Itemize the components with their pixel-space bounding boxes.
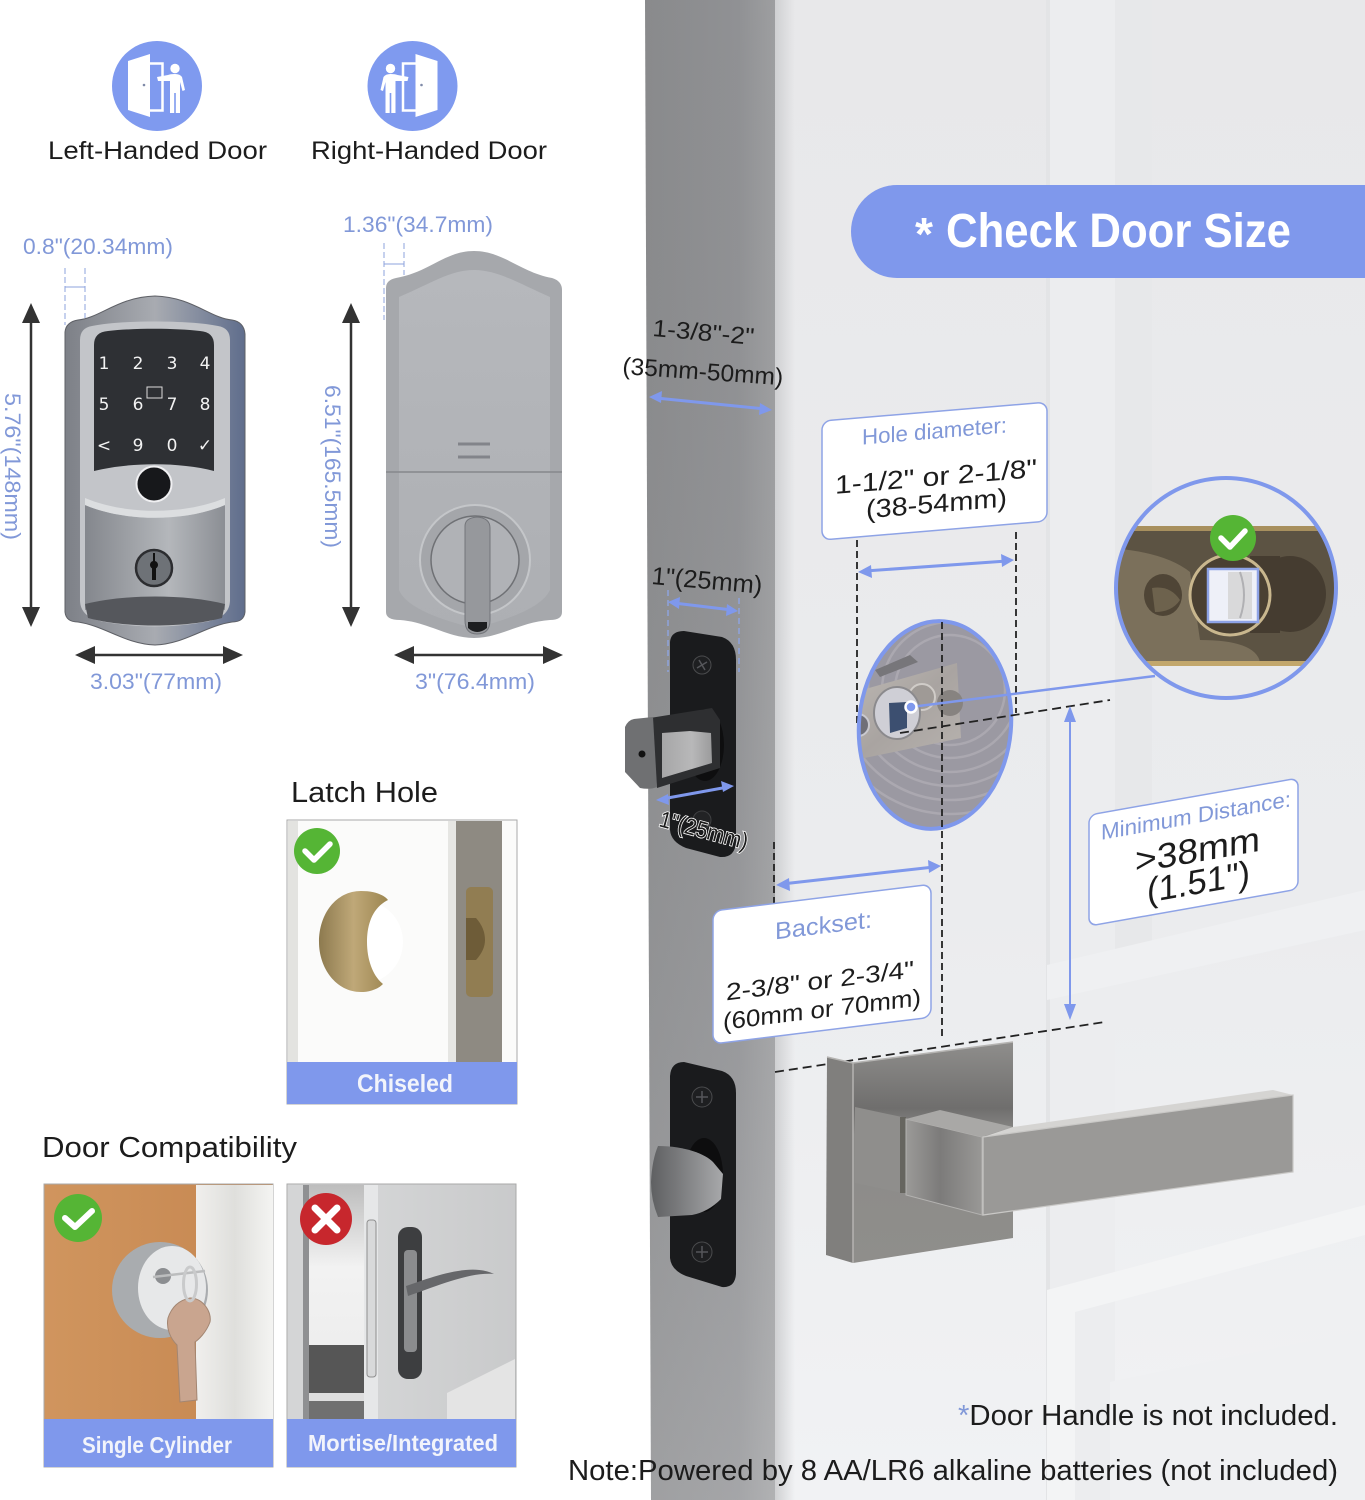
connector dot xyxy=(906,702,916,712)
check badge xyxy=(54,1194,102,1242)
height label: front lock: 5.76"(148mm) xyxy=(0,393,25,540)
callout: minimum distance: (1.51") xyxy=(1147,854,1250,911)
square socket xyxy=(1208,569,1258,622)
width arrow: front lock xyxy=(75,646,243,664)
bored hole xyxy=(319,900,403,984)
back body xyxy=(386,251,562,638)
check badge xyxy=(1210,515,1256,561)
mortise faceplate xyxy=(367,1220,376,1377)
callout: minimum distance: Minimum Distance: xyxy=(1101,787,1291,845)
depth dimension: front lock xyxy=(23,234,173,325)
keypad digits: 9 xyxy=(133,436,143,456)
callout: hole diameter xyxy=(822,402,1047,540)
door thickness dimension xyxy=(622,315,784,415)
door frame edge xyxy=(645,0,775,1500)
callout: minimum distance xyxy=(1089,778,1298,926)
heading: latch hole: Latch Hole xyxy=(291,777,438,809)
cross badge xyxy=(300,1193,352,1245)
bolt xyxy=(650,708,720,788)
check badge xyxy=(294,828,340,874)
lower lock housing xyxy=(85,505,225,610)
callout: hole diameter: Hole diameter: xyxy=(862,413,1007,450)
panel: door scene xyxy=(645,0,1365,1500)
banner: check door size: Check Door Size xyxy=(946,205,1291,258)
thumb turn xyxy=(420,505,530,615)
hole diameter dimension lines xyxy=(857,532,1016,725)
lever bar xyxy=(983,1095,1293,1215)
backset and centre guide lines xyxy=(774,622,1110,1072)
keypad digits xyxy=(97,354,212,456)
back lock illustration xyxy=(386,251,562,638)
keypad digits: 4 xyxy=(200,354,210,374)
door lever xyxy=(398,1227,422,1379)
lock body xyxy=(65,296,245,645)
upper plate width dimension xyxy=(650,562,763,672)
note: door handle not included: *Door Handle is not included. xyxy=(958,1400,1338,1432)
front lock illustration xyxy=(65,296,245,645)
rose plate xyxy=(826,1057,853,1263)
icon: left-handed door xyxy=(112,41,202,131)
label: right-handed door: Right-Handed Door xyxy=(311,137,547,165)
keypad digits: ✓ xyxy=(198,436,212,456)
banner: check door size: * xyxy=(915,208,933,260)
minimum distance arrow xyxy=(1064,706,1076,1020)
callout: backset: Backset: xyxy=(775,907,872,945)
panel: chiseled latch hole xyxy=(287,820,517,1104)
keyhole xyxy=(136,550,172,586)
lower strike plate with latch xyxy=(651,1062,736,1287)
callout: backset xyxy=(713,884,931,1044)
keypad digits: 8 xyxy=(200,395,210,415)
backset arrow xyxy=(776,860,941,891)
bored hole close-up xyxy=(856,619,1014,831)
callout: minimum distance: >38mm xyxy=(1135,820,1260,881)
magnifier connector line xyxy=(911,676,1155,707)
lower bolt width dimension: 1"(25mm) xyxy=(657,806,751,854)
key xyxy=(167,1298,210,1402)
card reader icon xyxy=(147,387,162,398)
keypad digits: < xyxy=(97,436,111,456)
latch mortise xyxy=(466,887,493,997)
fingerprint sensor xyxy=(136,466,172,502)
door thickness dimension: (35mm-50mm) xyxy=(622,353,784,391)
lever neck xyxy=(855,1107,902,1193)
note: batteries: Note:Powered by 8 AA/LR6 alkaline batteries (not included) xyxy=(568,1455,1338,1487)
depth dimension: front lock: 0.8"(20.34mm) xyxy=(23,234,173,259)
latch plate xyxy=(855,663,961,760)
callout: hole diameter: 1-1/2" or 2-1/8" xyxy=(835,453,1037,500)
keypad digits: 3 xyxy=(167,354,177,374)
keypad digits: 2 xyxy=(133,354,143,374)
upper plate width dimension: 1"(25mm) xyxy=(650,562,763,600)
width label: front lock: 3.03"(77mm) xyxy=(90,669,222,694)
callout: backset: 2-3/8" or 2-3/4" xyxy=(726,956,914,1006)
latch tongue xyxy=(651,1146,723,1217)
magnifier: spindle detail xyxy=(1110,478,1350,698)
banner: check door size xyxy=(851,185,1365,278)
lock cylinder xyxy=(112,1242,208,1338)
lever top edge xyxy=(983,1090,1293,1137)
blue caption: chiseled xyxy=(287,1062,517,1104)
callout: backset: (60mm or 70mm) xyxy=(723,985,921,1036)
keypad digits: 5 xyxy=(99,395,109,415)
keypad digits: 6 xyxy=(133,395,143,415)
keypad digits: 0 xyxy=(167,436,177,456)
callout: hole diameter: (38-54mm) xyxy=(866,483,1007,524)
door thickness dimension: 1-3/8"-2" xyxy=(651,315,755,351)
panel: single cylinder xyxy=(44,1184,273,1467)
heading: door compatibility: Door Compatibility xyxy=(42,1132,298,1164)
panel: mortise integrated: Mortise/Integrated xyxy=(308,1430,498,1456)
battery cover slits xyxy=(458,444,490,457)
panel: mortise integrated xyxy=(287,1184,516,1467)
panel: chiseled latch hole: Chiseled xyxy=(357,1070,453,1098)
door handle xyxy=(826,1042,1293,1263)
panel: single cylinder: Single Cylinder xyxy=(82,1432,232,1458)
height label: back lock: 6.51"(165.5mm) xyxy=(320,385,345,548)
icon: right-handed door xyxy=(368,41,458,131)
blue caption: mortise integrated xyxy=(287,1419,516,1467)
width label: back lock: 3"(76.4mm) xyxy=(415,669,535,694)
spindle socket xyxy=(874,687,920,739)
label: left-handed door: Left-Handed Door xyxy=(48,137,267,165)
depth dimension: back lock: 1.36"(34.7mm) xyxy=(343,212,493,237)
blue caption: single cylinder xyxy=(44,1419,273,1467)
width arrow: back lock xyxy=(394,646,563,664)
keypad digits: 7 xyxy=(167,395,177,415)
lower bolt width dimension xyxy=(656,781,751,854)
keypad digits: 1 xyxy=(99,354,109,374)
lever front block xyxy=(906,1119,982,1215)
height arrow: back lock xyxy=(342,303,360,627)
depth dimension: back lock xyxy=(343,212,493,320)
keypad xyxy=(94,329,214,471)
height arrow: front lock xyxy=(22,303,40,627)
lever block top xyxy=(906,1110,1013,1137)
upper strike plate with latch bolt xyxy=(625,631,736,857)
door leaf xyxy=(775,0,1365,1500)
